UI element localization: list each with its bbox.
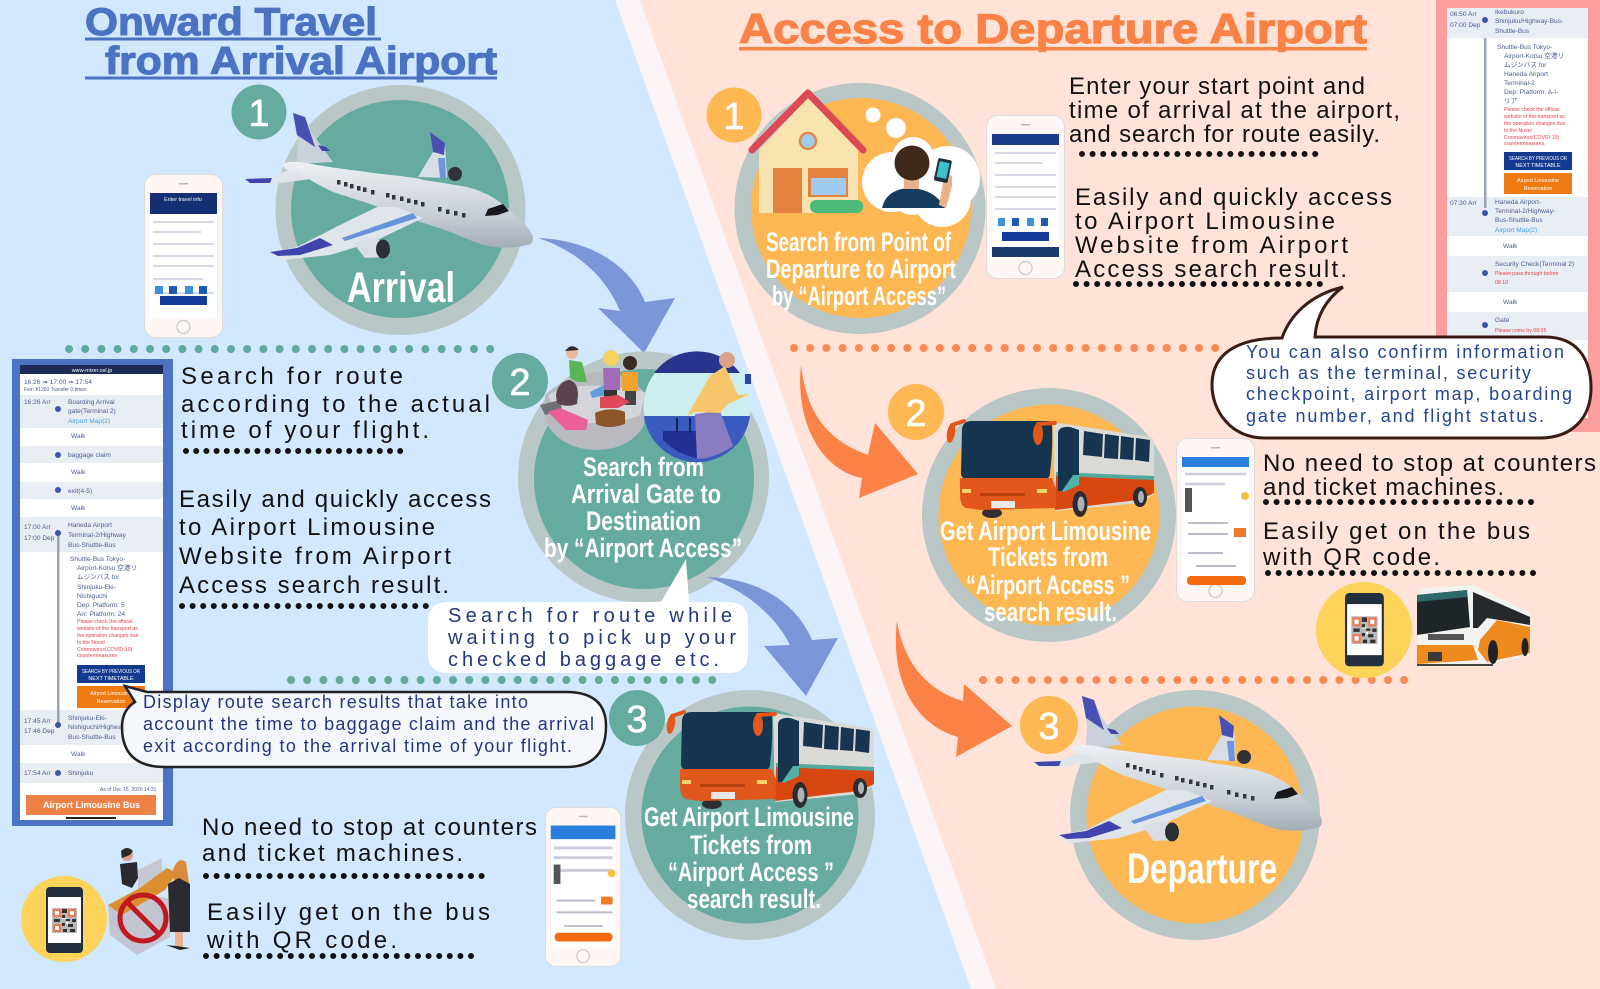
text: enter start point: Enter your start point and <box>1069 73 1365 100</box>
step badge 3: departure: 3 <box>1038 706 1060 748</box>
screenshot panel: arrival route: Boarding Arrival <box>68 399 115 406</box>
arrow: step 1 to step 2 departure <box>800 365 918 498</box>
callout: terminal and gate info: checkpoint, airport map, boarding <box>1246 384 1572 404</box>
screenshot panel: arrival route: 17:45 Arr <box>24 718 52 725</box>
screenshot panel: arrival route: Bus-Shuttle-Bus <box>68 734 116 741</box>
callout: search while waiting: Search for route while <box>448 605 732 627</box>
label: arrival: Arrival <box>347 264 455 312</box>
pink screenshot panel: departure route: Terminal-2/Highway- <box>1495 208 1555 215</box>
label: get tickets: “Airport Access ” <box>668 857 834 887</box>
pink screenshot panel: departure route: Airport Map(2) <box>1495 227 1537 234</box>
text: QR code boarding: with QR code. <box>206 927 397 954</box>
arrow: step 2 to step 3 <box>707 577 838 696</box>
phone: start point screen <box>986 116 1064 278</box>
callout: route search results: exit according to the arrival time of your flight. <box>143 736 572 756</box>
pink screenshot panel: departure route: Security Check(Terminal 2) <box>1495 261 1574 268</box>
illustration: traveller with suitcase <box>644 351 751 462</box>
screenshot panel: arrival route: countermeasures <box>77 653 117 659</box>
callout: terminal and gate info: You can also confirm information <box>1246 342 1564 362</box>
pink screenshot panel: departure route: Reservation <box>1524 186 1552 192</box>
screenshot panel: arrival route: Airport Map(2) <box>68 418 110 425</box>
screenshot panel: arrival route: Coronavirus(COVID-19) <box>77 647 133 653</box>
pink screenshot panel: departure route: Coronavirus(COVID-19) <box>1504 135 1560 141</box>
screenshot panel: arrival route: Fee: ¥1260 Transfer 0 times <box>24 387 87 393</box>
pink screenshot panel: departure route: Haneda Airport- <box>1495 199 1541 206</box>
pink screenshot panel: departure route: NEXT TIMETABLE <box>1515 163 1561 169</box>
icon: limousine bus <box>665 712 874 809</box>
screenshot panel: arrival route: 17:46 Dep <box>24 728 55 735</box>
screenshot panel: arrival route: exit(4-5) <box>68 488 92 495</box>
screenshot panel: arrival route: As of Dec 15, 2020 14:31 <box>100 787 157 793</box>
text: no need to stop <box>202 814 537 867</box>
step badge 3: departure <box>1020 696 1078 754</box>
label: search from point of departure: Departure to Airport <box>766 254 956 284</box>
phone: search screen: Enter travel info <box>164 197 202 203</box>
callout: terminal and gate info: such as the terminal, security <box>1246 363 1531 383</box>
label: get tickets departure: “Airport Access ” <box>966 570 1130 600</box>
step 3 circle: departure <box>1070 690 1320 940</box>
pink screenshot panel: departure route: Shuttle-Bus <box>1495 28 1530 35</box>
step badge 2: departure <box>888 384 944 440</box>
background: departure side <box>640 0 1600 989</box>
text: access website departure <box>1075 184 1392 283</box>
text: QR boarding departure: Easily get on the bus <box>1263 518 1530 545</box>
text: no need to stop departure: and ticket machines. <box>1263 474 1504 501</box>
screenshot panel: arrival route: Airport Limousine Bus <box>43 800 140 810</box>
pink screenshot panel: departure route: Please check the official <box>1504 107 1560 113</box>
step 1 circle: arrival <box>276 85 526 335</box>
icon: QR phone departure <box>1316 582 1412 678</box>
phone: ticket screen departure <box>1176 438 1254 602</box>
pink screenshot panel: departure route: Bus-Shuttle-Bus <box>1495 217 1543 224</box>
illustration: baggage claim group <box>540 346 646 450</box>
screenshot panel: arrival route <box>12 359 173 826</box>
screenshot panel: arrival route: 17:00 Arr <box>24 524 52 531</box>
screenshot panel: arrival route: ムジンバス for <box>77 573 120 581</box>
label: search from point of departure <box>766 227 956 311</box>
phone: search screen <box>144 174 222 338</box>
text: access limousine website: Easily and quickly access <box>179 486 491 513</box>
icon: airplane departing <box>1034 696 1322 843</box>
pink screenshot panel: departure route: Haneda Airport <box>1504 71 1548 78</box>
label: get tickets departure <box>940 516 1151 627</box>
text: enter start point: time of arrival at the airport, <box>1069 97 1400 124</box>
step badge 1: arrival: 1 <box>248 93 270 135</box>
pink screenshot panel: departure route: to the Novel <box>1504 128 1532 134</box>
pink screenshot panel: departure route: Terminal-2 <box>1504 80 1535 87</box>
pink screenshot panel: departure route: SEARCH BY PREVIOUS OR <box>1509 156 1567 162</box>
label: get tickets: Get Airport Limousine <box>644 802 854 832</box>
pink screenshot panel: departure route: 08:10 <box>1495 280 1508 286</box>
text: search for route <box>181 363 490 444</box>
pink screenshot panel: departure route: the operation changes due <box>1504 121 1566 127</box>
label: get tickets departure: search result. <box>984 597 1117 627</box>
step badge 1: departure: 1 <box>723 96 745 138</box>
label: get tickets <box>644 802 854 914</box>
screenshot panel: arrival route: Please check the official <box>77 619 133 625</box>
illustration: house <box>752 93 863 213</box>
text: no need to stop departure <box>1263 450 1596 501</box>
callout: search while waiting <box>428 559 748 673</box>
icon: ticket counter prohibited <box>108 848 190 955</box>
screenshot panel: arrival route: Reservation <box>97 699 125 705</box>
pink screenshot panel: departure route: Walk <box>1503 243 1518 250</box>
title: onward travel: from Arrival Airport <box>105 40 497 83</box>
screenshot panel: arrival route: 17:54 Arr <box>24 770 52 777</box>
pink screenshot panel: departure route: Dep: Platform: A-I- <box>1504 89 1558 96</box>
text: access limousine website: to Airport Limousine <box>179 514 435 541</box>
label: get tickets departure: Tickets from <box>988 542 1108 572</box>
pink screenshot panel: departure route: Gate <box>1495 317 1510 324</box>
label: search from arrival gate: Destination <box>586 506 701 536</box>
label: get tickets departure: Get Airport Limousine <box>940 516 1151 546</box>
screenshot panel: arrival route: Shinjuku <box>68 770 94 777</box>
label: get tickets: search result. <box>687 884 821 914</box>
text: access website departure: to Airport Limousine <box>1075 208 1335 235</box>
pink screenshot panel: departure route: 07:30 Arr <box>1450 200 1478 207</box>
title: access to departure airport: Access to Departure Airport <box>739 5 1367 52</box>
screenshot panel: arrival route: 17:00 Dep <box>24 535 55 542</box>
screenshot panel: arrival route: Shuttle-Bus Tokyo- <box>70 556 125 563</box>
callout: terminal and gate info <box>1212 287 1591 438</box>
pink screenshot panel: departure route: リア <box>1504 97 1518 105</box>
callout: route search results <box>122 686 606 767</box>
label: search from point of departure: by “Airport Access” <box>772 281 946 311</box>
arrow: arrival to step 2 <box>538 238 675 353</box>
screenshot panel: arrival route: gate(Terminal 2) <box>68 408 116 415</box>
pink screenshot panel: departure route: Please come by 08:35 <box>1495 328 1546 334</box>
text: QR boarding departure <box>1262 518 1530 571</box>
icon: QR phone arrival <box>21 876 107 962</box>
screenshot panel: arrival route: www-mixer.osl.jp <box>71 368 112 374</box>
pink screenshot panel: departure route <box>1436 0 1600 432</box>
step badge 2: arrival <box>492 353 548 409</box>
screenshot panel: arrival route: Walk <box>71 433 86 440</box>
label: search from arrival gate: Arrival Gate to <box>571 479 721 509</box>
screenshot panel: arrival route: baggage claim <box>68 452 111 459</box>
screenshot panel: arrival route: Walk <box>71 505 86 512</box>
screenshot panel: arrival route: Haneda Airport <box>68 522 112 529</box>
screenshot panel: arrival route: Airport Limousine <box>90 691 132 697</box>
screenshot panel: arrival route: NEXT TIMETABLE <box>88 676 134 682</box>
title: onward travel: Onward Travel <box>85 1 377 44</box>
screenshot panel: arrival route: Walk <box>71 751 86 758</box>
text: access limousine website <box>179 486 491 599</box>
text: enter start point: and search for route easily. <box>1069 121 1380 148</box>
screenshot panel: arrival route: Walk <box>71 469 86 476</box>
text: access limousine website: Access search result. <box>179 572 449 599</box>
step badge 2: departure: 2 <box>905 393 927 435</box>
callout: route search results: Display route search results that take into <box>143 692 528 712</box>
pink screenshot panel: departure route: website of the transport as <box>1504 114 1565 120</box>
pink screenshot panel: departure route: Please pass through before <box>1495 271 1559 277</box>
callout: terminal and gate info: gate number, and flight status. <box>1246 406 1544 426</box>
text: search for route: Search for route <box>181 363 403 390</box>
screenshot panel: arrival route: SEARCH BY PREVIOUS OR <box>82 669 140 675</box>
label: departure: Departure <box>1127 845 1277 893</box>
screenshot panel: arrival route: to the Novel <box>77 640 105 646</box>
callout: route search results: account the time to baggage claim and the arrival <box>143 714 594 734</box>
label: get tickets: Tickets from <box>690 830 812 860</box>
text: QR code boarding: Easily get on the bus <box>207 899 490 926</box>
pink screenshot panel: departure route: Airport-Kotsu 空港リ <box>1504 51 1564 60</box>
step badge 2: arrival: 2 <box>509 362 531 404</box>
screenshot panel: arrival route: Airport-Kotsu 空港リ <box>77 563 137 572</box>
text: access website departure: Website from Airport <box>1075 232 1348 259</box>
icon: limousine bus departure <box>945 421 1154 518</box>
photo: airport limousine bus <box>1417 585 1530 666</box>
text: no need to stop departure: No need to stop at counters <box>1263 450 1596 477</box>
text: no need to stop: No need to stop at counters <box>202 814 537 841</box>
step 3 circle: limousine tickets <box>625 690 875 940</box>
step badge 3: arrival: 3 <box>626 699 648 741</box>
text: enter start point <box>1069 73 1400 148</box>
screenshot panel: arrival route: Terminal-2/Highway <box>68 532 127 539</box>
callout: search while waiting: checked baggage etc. <box>448 649 719 671</box>
text: QR boarding departure: with QR code. <box>1262 544 1440 571</box>
label: search from arrival gate <box>544 452 742 563</box>
pink screenshot panel: departure route: Airport Limousine <box>1517 178 1559 184</box>
pink screenshot panel: departure route: Ikebukuro <box>1495 9 1524 16</box>
screenshot panel: arrival route: Shinjuku-Eki- <box>68 715 107 722</box>
pink screenshot panel: departure route: Walk <box>1503 299 1518 306</box>
text: no need to stop: and ticket machines. <box>202 840 463 867</box>
step 2 circle: search at arrival gate <box>518 352 769 602</box>
screenshot panel: arrival route: 16:26 Arr <box>24 399 52 406</box>
pink screenshot panel: departure route: 06:50 Arr <box>1450 11 1478 18</box>
step 2 circle: limousine tickets departure <box>922 388 1176 642</box>
title: onward travel <box>85 1 497 83</box>
pink screenshot panel: departure route: Shinjuku/Highway-Bus- <box>1495 18 1563 25</box>
label: search from point of departure: Search from Point of <box>766 227 952 257</box>
screenshot panel: arrival route: Dep: Platform: 5 <box>77 602 125 609</box>
step badge 1: arrival <box>232 84 286 140</box>
screenshot panel: arrival route: Bus-Shuttle-Bus <box>68 542 116 549</box>
text: search for route: according to the actual <box>181 391 490 418</box>
pink screenshot panel: departure route: countermeasures. <box>1504 141 1546 147</box>
text: search for route: time of your flight. <box>181 417 429 444</box>
arrow: step 2 to step 3 departure <box>896 621 1012 757</box>
screenshot panel: arrival route: the operation changes due <box>77 633 139 639</box>
icon: airplane arriving <box>245 113 533 260</box>
label: search from arrival gate: Search from <box>583 452 704 482</box>
screenshot panel: arrival route: Shinjuku-Eki- <box>77 584 116 591</box>
text: access website departure: Access search result. <box>1075 256 1347 283</box>
callout: search while waiting: waiting to pick up your <box>447 627 736 649</box>
illustration: person with phone <box>862 108 980 227</box>
step badge 1: departure <box>706 88 762 142</box>
screenshot panel: arrival route: 16:26 ➟ 17:00 ➟ 17:54 <box>24 379 92 386</box>
pink screenshot panel: departure route: Shuttle-Bus Tokyo- <box>1497 44 1552 51</box>
pink screenshot panel: departure route: 07:00 Dep <box>1450 22 1481 29</box>
step badge 3: arrival <box>609 690 665 746</box>
label: search from arrival gate: by “Airport Access” <box>544 533 742 563</box>
text: access limousine website: Website from Airport <box>179 543 451 570</box>
text: QR code boarding <box>206 899 490 954</box>
screenshot panel: arrival route: Arr: Platform: 24 <box>77 611 125 618</box>
text: access website departure: Easily and quickly access <box>1075 184 1392 211</box>
pink screenshot panel: departure route: ムジンバス for <box>1504 61 1547 69</box>
phone: ticket screen arrival <box>545 807 621 966</box>
screenshot panel: arrival route: Nishiguchi/Highway <box>68 724 126 731</box>
screenshot panel: arrival route: website of the transport as <box>77 626 138 632</box>
screenshot panel: arrival route: Nishiguchi <box>77 593 108 600</box>
step 1 circle: search from departure point <box>734 83 986 334</box>
